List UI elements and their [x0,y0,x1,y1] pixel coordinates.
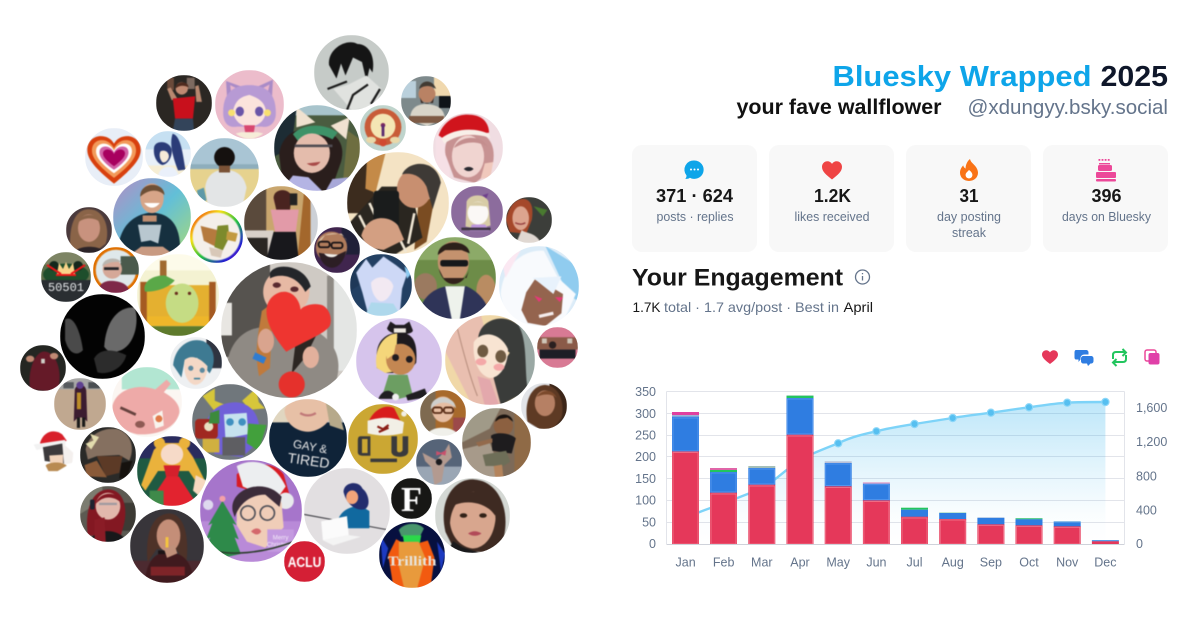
icon: flame [960,159,978,181]
month labels: Oct [1019,556,1039,570]
bar: Feb [710,468,737,544]
stat card: posts and replies: 371 · 624 [656,186,733,206]
bar: Nov [1054,521,1081,544]
subtitle: nickname: your fave wallflower [736,96,942,119]
month labels: Nov [1056,556,1079,570]
stacked bars: likes, replies, reposts, quotes [672,395,1119,544]
avatar: anime girl in pink hood [445,315,535,405]
avatar: man from behind on beach [190,138,259,207]
right y-axis labels: 1,200 [1136,435,1167,449]
stat card: days on Bluesky: days on Bluesky [1062,209,1151,224]
avatar: mirror selfie in pink top [244,186,318,260]
bar: Apr [786,395,814,544]
x axis line [666,544,1124,546]
icon: quotes squares [1145,350,1160,364]
avatar: orange ring man with glasses [93,247,139,293]
month labels: May [826,556,851,570]
avatar: boy in santa hat with christmas tree: Merry [273,535,289,542]
avatar: bearded man in suit and sunglasses [414,237,496,319]
icon: chat bubble [684,160,704,179]
bar: Oct [1016,518,1042,544]
avatar: blue-faced robot character with reindeer antlers [192,384,268,460]
month labels: Dec [1094,556,1117,570]
stat card: posts and replies: posts · replies [656,209,734,224]
avatar: purple cat girl [215,70,284,139]
avatar: redhead woman [506,197,552,243]
avatar: Trillith flame graphic [379,522,445,588]
avatar: group on pink floral wall [537,327,578,368]
bar: Dec [1092,540,1119,544]
icon: birthday cake [1096,159,1116,182]
stat card: likes received [769,145,894,252]
stat card: days on Bluesky: 396 [1092,186,1122,206]
stat card: likes received: likes received [794,209,870,224]
avatar: teal-haired anime girl [170,337,222,389]
engagement summary: April [844,299,873,315]
avatar: santa hat cosplay girl [433,113,503,183]
avatar: woman holding red paper heart [221,262,357,398]
stat card: day posting streak [906,145,1031,252]
avatar: blonde woman portrait [66,207,112,253]
avatar: chibi with cat on lavender [356,318,442,404]
avatar: smiling man with gradient background [113,178,191,256]
avatar: ACLU logo [284,541,325,582]
month labels [676,556,1117,570]
avatar: woman in red shirt [156,75,212,131]
avatar: F logo: F [401,481,422,519]
heading: Your Engagement: Your Engagement [632,264,843,292]
avatar: brunette woman portrait [435,478,510,553]
avatar: yellow face with santa hat [348,404,418,474]
bar: Mar [748,466,775,544]
left y-axis labels: 50 [642,516,656,530]
avatar: F logo [391,478,432,519]
subtitle: handle: @xdungyy.bsky.social [968,97,1168,119]
avatar: red-haired woman with headset [80,486,136,542]
avatar: older woman with glasses [420,390,466,436]
combo chart: monthly engagement [635,385,1167,570]
icon: reposts arrows [1113,349,1126,366]
month labels: Feb [713,556,735,570]
bar: Jun [863,482,890,544]
avatar: boy in santa hat with christmas tree: Christmas [267,542,294,549]
avatar: laughing man with glasses [314,227,360,273]
avatar: white-haired anime character [499,246,579,326]
month labels: Jun [866,556,887,570]
panel: avatar bubble cluster [20,35,579,588]
avatar: dark-haired woman with lipstick [130,509,204,583]
left y-axis labels: 350 [635,385,656,399]
avatar: dragon with rainbow ring [190,210,243,263]
avatar: anime boy in santa hat [34,430,73,472]
icon: heart [822,161,842,180]
month labels: Jul [907,556,922,570]
avatar: bearded man at table [401,76,451,126]
bar: Jan [672,412,699,544]
chart legend [1042,349,1160,366]
avatar: woman in Gay and Tired shirt: GAY & [292,438,329,456]
title: 2025 [1100,61,1168,93]
bar: Sep [977,517,1004,544]
icon: replies bubbles [1074,350,1094,366]
avatar: fox-ear hat girl with glasses [274,105,360,191]
stat card: likes received: 1.2K [814,186,851,206]
avatar: boy in santa hat with christmas tree [200,460,302,562]
avatar: person in long coat outdoors [54,378,106,430]
right y-axis labels: 0 [1136,537,1143,551]
avatar: icy blue anime character [350,254,412,316]
right y-axis labels: 1,600 [1136,401,1167,415]
title: Bluesky Wrapped [832,61,1092,93]
left y-axis labels: 250 [635,428,656,442]
avatar: 50501 frog: 50501 [48,281,84,295]
avatar: 50501 frog [41,252,91,302]
avatar: blue-haired anime sketch [145,131,191,177]
stat card: day posting streak: streak [952,225,986,240]
avatar: man taking mirror selfie with phone [347,152,449,254]
left y-axis labels: 200 [635,450,656,464]
avatar: Trillith flame graphic: Trillith [388,554,437,569]
avatar: woman with long auburn hair [521,383,567,429]
avatar: woman with dark red hair from behind [20,345,66,391]
month labels: Apr [790,556,810,570]
cumulative area and line [686,398,1109,544]
stat card: days on Bluesky [1043,145,1168,252]
avatar: woman in Gay and Tired shirt [269,399,347,477]
engagement summary: total · 1.7 avg/post · Best in [664,299,839,315]
bar: Aug [939,512,966,544]
chart grid [666,392,1124,544]
avatar: dark moth wings [60,294,145,379]
engagement summary: 1.7K [632,299,661,315]
avatar: monochrome manga man [314,35,389,110]
avatar: concentric heart flag [85,128,143,186]
avatar: pink bird [112,367,182,437]
stat card: day posting streak: day posting [937,209,1001,224]
avatar: woman in Gay and Tired shirt: TIRED [287,449,331,471]
stat card: posts and replies [632,145,757,252]
right y-axis labels: 400 [1136,504,1157,518]
left y-axis labels [635,385,656,551]
right y-axis labels: 800 [1136,470,1157,484]
avatar: afro anime man [80,427,136,483]
month labels: Mar [751,556,773,570]
month labels: Jan [676,556,696,570]
avatar: rudolph deer with bow [416,439,462,485]
left y-axis labels: 300 [635,407,656,421]
month labels: Aug [942,556,964,570]
icon: info [856,270,870,284]
avatar: purple chibi [451,186,503,238]
month labels: Sep [980,556,1002,570]
avatar: man seated on porch [462,408,531,477]
icon: likes heart [1042,350,1058,364]
avatar: keyhole crest [360,105,406,151]
stat card: day posting streak: 31 [960,186,978,206]
left y-axis labels: 0 [649,537,656,551]
avatar: sailor moon in red dress [137,436,207,506]
left y-axis labels: 100 [635,494,656,508]
avatar: woman at laptop illustration [304,468,390,554]
left y-axis labels: 150 [635,472,656,486]
right y-axis labels [1136,401,1167,551]
avatar: chikorita on yellow couch [137,254,219,336]
bar: Jul [901,508,928,544]
bar: May [825,461,852,544]
